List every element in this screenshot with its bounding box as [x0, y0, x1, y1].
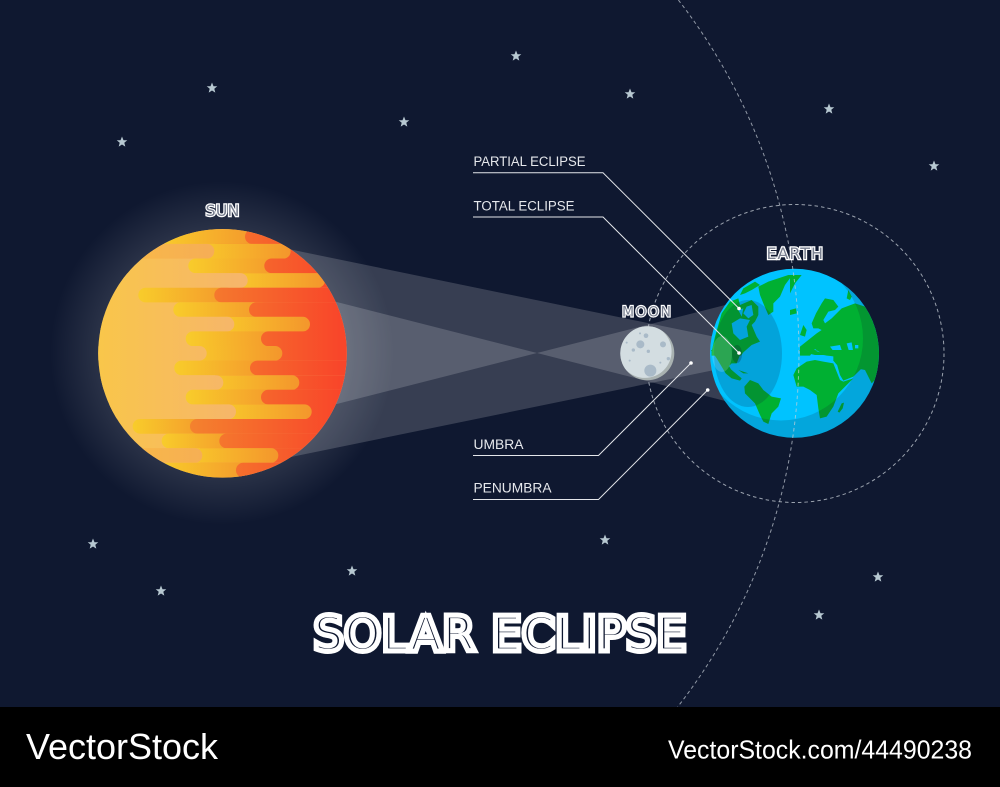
stars: [88, 50, 939, 620]
label: penumbra: PENUMBRA: [474, 480, 552, 496]
moon lit face: [618, 325, 672, 378]
beam light on earth limb: [712, 336, 732, 372]
earth ocean: [710, 269, 879, 438]
label: umbra: UMBRA: [474, 437, 524, 452]
leader: total eclipse: [473, 217, 741, 355]
night side shading: [720, 283, 879, 438]
moon orbit: [646, 204, 944, 502]
eurasia north: [790, 275, 882, 356]
penumbra beam: [280, 247, 740, 459]
label: moon: MOON: [622, 304, 671, 320]
footer image id: VectorStock.com/44490238: [668, 734, 972, 764]
label: earth: EARTH: [766, 244, 823, 263]
label: sun: SUN: [206, 201, 240, 220]
leader: partial eclipse: [473, 173, 741, 310]
leader: penumbra: [473, 388, 710, 500]
sun glow: [50, 181, 394, 525]
central and south america: [711, 350, 781, 424]
label: earth: EARTH: [766, 244, 823, 263]
earth orbit arc: [678, 0, 799, 707]
title: SOLAR ECLIPSE: [314, 607, 686, 661]
title: SOLAR ECLIPSE: [314, 607, 686, 661]
label: partial eclipse: PARTIAL ECLIPSE: [474, 154, 586, 169]
umbra shadow on earth: [714, 300, 782, 407]
earth surface: [711, 275, 879, 438]
label: moon: MOON: [622, 304, 671, 320]
moon: [618, 325, 674, 380]
leader: umbra: [473, 361, 693, 456]
earth: [710, 268, 879, 438]
label: sun: SUN: [206, 201, 240, 220]
americas and greenland: [712, 275, 792, 356]
footer bar: [0, 707, 1000, 787]
umbra beam: [320, 298, 537, 408]
africa and asia south: [793, 350, 882, 418]
total eclipse spot: [732, 345, 742, 363]
label: total eclipse: TOTAL ECLIPSE: [474, 198, 574, 214]
umbra beam past crossing: [537, 301, 740, 405]
footer brand: VectorStock: [26, 726, 219, 767]
sun: [98, 229, 347, 478]
